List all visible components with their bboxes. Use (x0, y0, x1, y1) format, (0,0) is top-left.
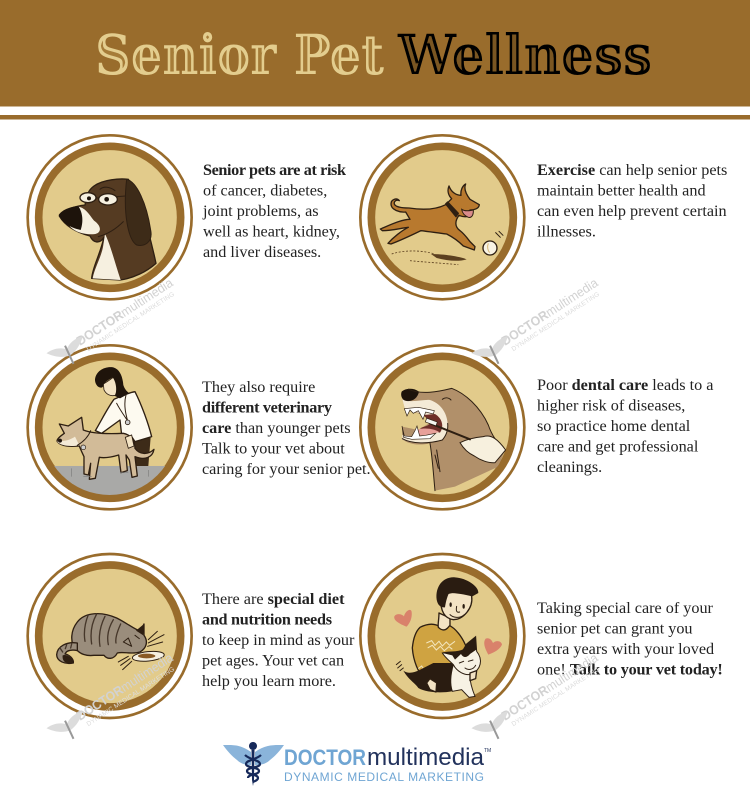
text block: senior pets at risk: well as heart, kidney, (203, 222, 340, 240)
watermark: top left: DOCTORmultimedia (73, 275, 176, 349)
logo: Doctor Multimedia: DYNAMIC MEDICAL MARKETING (284, 770, 484, 784)
text block: diet and nutrition: There are special diet (202, 590, 344, 608)
watermark: top right: DOCTORmultimedia (498, 275, 601, 349)
text block: senior pets at risk: Senior pets are at risk (203, 161, 346, 179)
watermark: bottom left: DYNAMIC MEDICAL MARKETING (86, 666, 177, 728)
text block: diet and nutrition: help you learn more. (202, 672, 336, 690)
text block: exercise: Exercise can help senior pets (537, 161, 727, 179)
text block: veterinary care: They also require (202, 378, 315, 396)
text block: senior pets at risk: joint problems, as (202, 202, 319, 220)
panel: dog getting teeth brushed (360, 345, 524, 509)
logo: Doctor Multimedia (223, 742, 491, 786)
text block: senior pets at risk: of cancer, diabetes, (203, 182, 327, 200)
text block: dental care: Poor dental care leads to a (537, 376, 713, 394)
header banner (0, 0, 750, 106)
title: Wellness (397, 22, 652, 87)
icon: caduceus (223, 742, 284, 786)
watermark: bottom left (46, 650, 181, 747)
text block: exercise: illnesses. (537, 222, 596, 240)
text block: diet and nutrition: to keep in mind as your (202, 631, 355, 649)
watermark: bottom left: DOCTORmultimedia (73, 650, 176, 724)
header rule (0, 115, 750, 120)
text block: diet and nutrition: pet ages. Your vet can (202, 652, 344, 670)
panel: cat eating from a dish (28, 554, 192, 718)
watermark: top right (471, 275, 606, 372)
logo: Doctor Multimedia: multimedia (367, 744, 485, 771)
watermark: bottom right: DOCTORmultimedia (498, 650, 601, 724)
title (95, 22, 652, 87)
watermark: bottom right (471, 650, 606, 747)
text block: dental care: so practice home dental (537, 417, 691, 435)
watermark: top left: DYNAMIC MEDICAL MARKETING (86, 291, 177, 353)
text block: exercise: can even help prevent certain (537, 202, 727, 220)
text block: exercise: maintain better health and (537, 182, 706, 200)
text block: talk to your vet: extra years with your loved (537, 640, 714, 658)
text block: veterinary care: Talk to your vet about (202, 440, 345, 458)
text block: diet and nutrition: and nutrition needs (202, 610, 332, 628)
text block: talk to your vet: senior pet can grant you (537, 620, 693, 638)
watermark: bottom right: DYNAMIC MEDICAL MARKETING (511, 666, 602, 728)
panel: man hugging husky with hearts (360, 554, 524, 718)
watermark: top left (46, 275, 181, 372)
panel: vet examining dog (28, 345, 192, 509)
text block: veterinary care: caring for your senior pet. (202, 460, 371, 478)
text block: dental care: care and get professional (537, 438, 699, 456)
watermark: top right: DYNAMIC MEDICAL MARKETING (511, 291, 602, 353)
icon: left heart (394, 610, 412, 627)
text block: veterinary care: care than younger pets (202, 419, 350, 437)
logo: Doctor Multimedia: DOCTOR (284, 745, 366, 770)
text block: talk to your vet: Taking special care of your (537, 599, 714, 617)
text block: dental care: cleanings. (537, 458, 602, 476)
panel: dog running after ball (360, 135, 524, 299)
panel: senior dog with glasses (28, 135, 192, 299)
text block: dental care: higher risk of diseases, (537, 396, 685, 414)
text block: senior pets at risk: and liver diseases. (203, 243, 321, 261)
logo: Doctor Multimedia: TM (484, 748, 491, 754)
title: Senior Pet (95, 22, 385, 87)
text block: talk to your vet: one! Talk to your vet today! (537, 660, 723, 678)
icon: right heart (484, 638, 502, 655)
text block: veterinary care: different veterinary (202, 398, 332, 416)
